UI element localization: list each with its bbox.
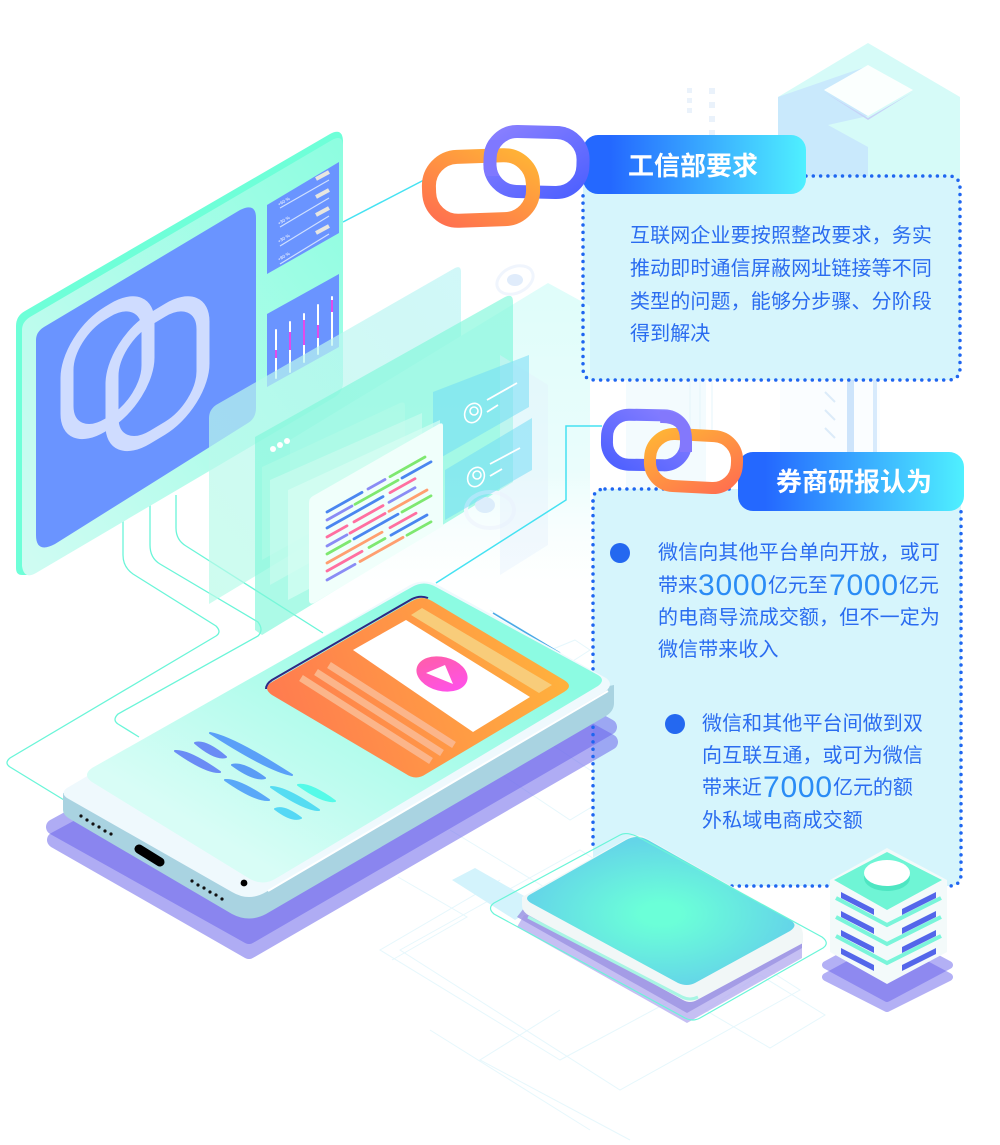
text block: bullet one: 的电商导流成交额，但不一定为 xyxy=(658,606,940,629)
broker header xyxy=(738,452,964,511)
requirement text: 推动即时通信屏蔽网址链接等不同 xyxy=(630,257,932,280)
tablet mint edge xyxy=(528,917,698,999)
stack blue labels xyxy=(841,892,936,971)
small stat panel: +30 % xyxy=(277,215,291,226)
stack purple bases xyxy=(826,932,949,1008)
broker box left dotted border xyxy=(591,501,595,850)
monitor xyxy=(16,132,343,575)
broker header: 券商研报认为 xyxy=(776,467,932,497)
icon: large chain rings xyxy=(67,287,203,460)
text dashes on phone xyxy=(175,733,335,819)
document card with coloured text lines xyxy=(309,423,443,604)
text block: bullet one: 亿元至 xyxy=(768,574,828,597)
connector line: monitor to chain xyxy=(343,180,424,222)
text stripes xyxy=(301,665,454,761)
background: faint isometric grid xyxy=(380,610,825,1140)
small stat panel xyxy=(267,162,339,274)
text block: bullet two: 亿元的额 xyxy=(833,776,913,799)
tablet purple base lower xyxy=(517,915,802,1023)
text block: bullet one: 7000 xyxy=(829,569,898,602)
phone xyxy=(63,582,614,918)
text block: bullet one: 微信向其他平台单向开放，或可 xyxy=(658,541,940,564)
monitor edge xyxy=(16,132,343,575)
user card 2 xyxy=(445,418,532,520)
tablet body xyxy=(522,835,803,1002)
icon: play button xyxy=(413,651,471,697)
glass panel back xyxy=(209,267,461,604)
connector line: phone to lower chain xyxy=(436,426,602,583)
glass panel front xyxy=(255,296,513,635)
stack column body xyxy=(830,848,947,984)
text block: bullet two: 微信和其他平台间做到双 xyxy=(702,712,923,735)
background: pale hexagon with white diamond xyxy=(778,43,960,180)
small stat panel: +80 % xyxy=(277,251,291,262)
background: pale diamond xyxy=(452,868,540,920)
bullet point one xyxy=(610,543,630,563)
camera dot xyxy=(241,880,247,886)
requirement text xyxy=(630,224,932,345)
icon: lower chain link xyxy=(607,414,738,489)
small stat panel: +60 % xyxy=(277,196,291,207)
main blue panel xyxy=(36,207,256,547)
pale blue block xyxy=(500,355,548,575)
speaker dots xyxy=(79,814,224,901)
monitor face xyxy=(22,138,343,575)
stack top face xyxy=(834,852,942,910)
phone highlight edge xyxy=(268,691,608,891)
window layers xyxy=(262,402,440,635)
tablet purple base upper xyxy=(517,908,802,1013)
requirement text: 类型的问题，能够分步骤、分阶段 xyxy=(630,290,932,313)
text block: bullet one: 亿元 xyxy=(899,574,939,597)
screen dark edge xyxy=(266,597,428,689)
text block: bullet two: 向互联互通，或可为微信 xyxy=(702,744,923,767)
phone top bezel xyxy=(64,582,610,897)
tablet mint outline xyxy=(490,834,826,1020)
white video area xyxy=(353,620,530,732)
requirement box dotted border xyxy=(583,176,960,380)
header bar xyxy=(411,608,552,693)
stack mint strips xyxy=(836,898,941,963)
text block: bullet one: 带来 xyxy=(658,574,698,597)
requirement text: 得到解决 xyxy=(630,322,710,345)
text block: bullet one: 微信带来收入 xyxy=(658,638,779,661)
requirement header: 工信部要求 xyxy=(628,151,758,181)
tablet screen xyxy=(527,837,794,985)
text block: bullet two: 外私域电商成交额 xyxy=(702,809,863,832)
text block: bullet two xyxy=(702,712,923,832)
phone shadow layers xyxy=(54,625,610,951)
requirement text: 互联网企业要按照整改要求，务实 xyxy=(630,224,932,247)
bullet point two xyxy=(665,714,685,734)
icon: upper chain link xyxy=(428,131,584,222)
text block: bullet two: 带来近 xyxy=(702,776,762,799)
panel: requirement box background xyxy=(583,176,960,380)
text block: bullet one xyxy=(658,541,940,661)
charging port xyxy=(139,849,160,862)
server stack xyxy=(826,848,949,1008)
broker box dotted top and bottom border xyxy=(593,489,961,886)
user card 1 xyxy=(433,355,529,462)
orange video screen xyxy=(267,598,569,778)
white disc xyxy=(864,860,910,891)
thin blue line beside phone xyxy=(493,613,560,653)
tablet xyxy=(490,834,826,1023)
pale hex background block xyxy=(290,283,590,620)
ripple icons xyxy=(466,260,538,528)
background: dotted columns xyxy=(626,88,880,490)
text block: bullet two: 7000 xyxy=(763,771,832,804)
panel: broker research box background xyxy=(593,489,961,886)
requirement header xyxy=(583,135,806,194)
phone side xyxy=(63,685,614,918)
small bar chart panel xyxy=(267,274,339,387)
phone face xyxy=(87,584,602,882)
small stat panel: +30 % xyxy=(277,233,291,244)
text block: bullet one: 3000 xyxy=(698,569,767,602)
circuit lines from monitor xyxy=(7,495,323,800)
